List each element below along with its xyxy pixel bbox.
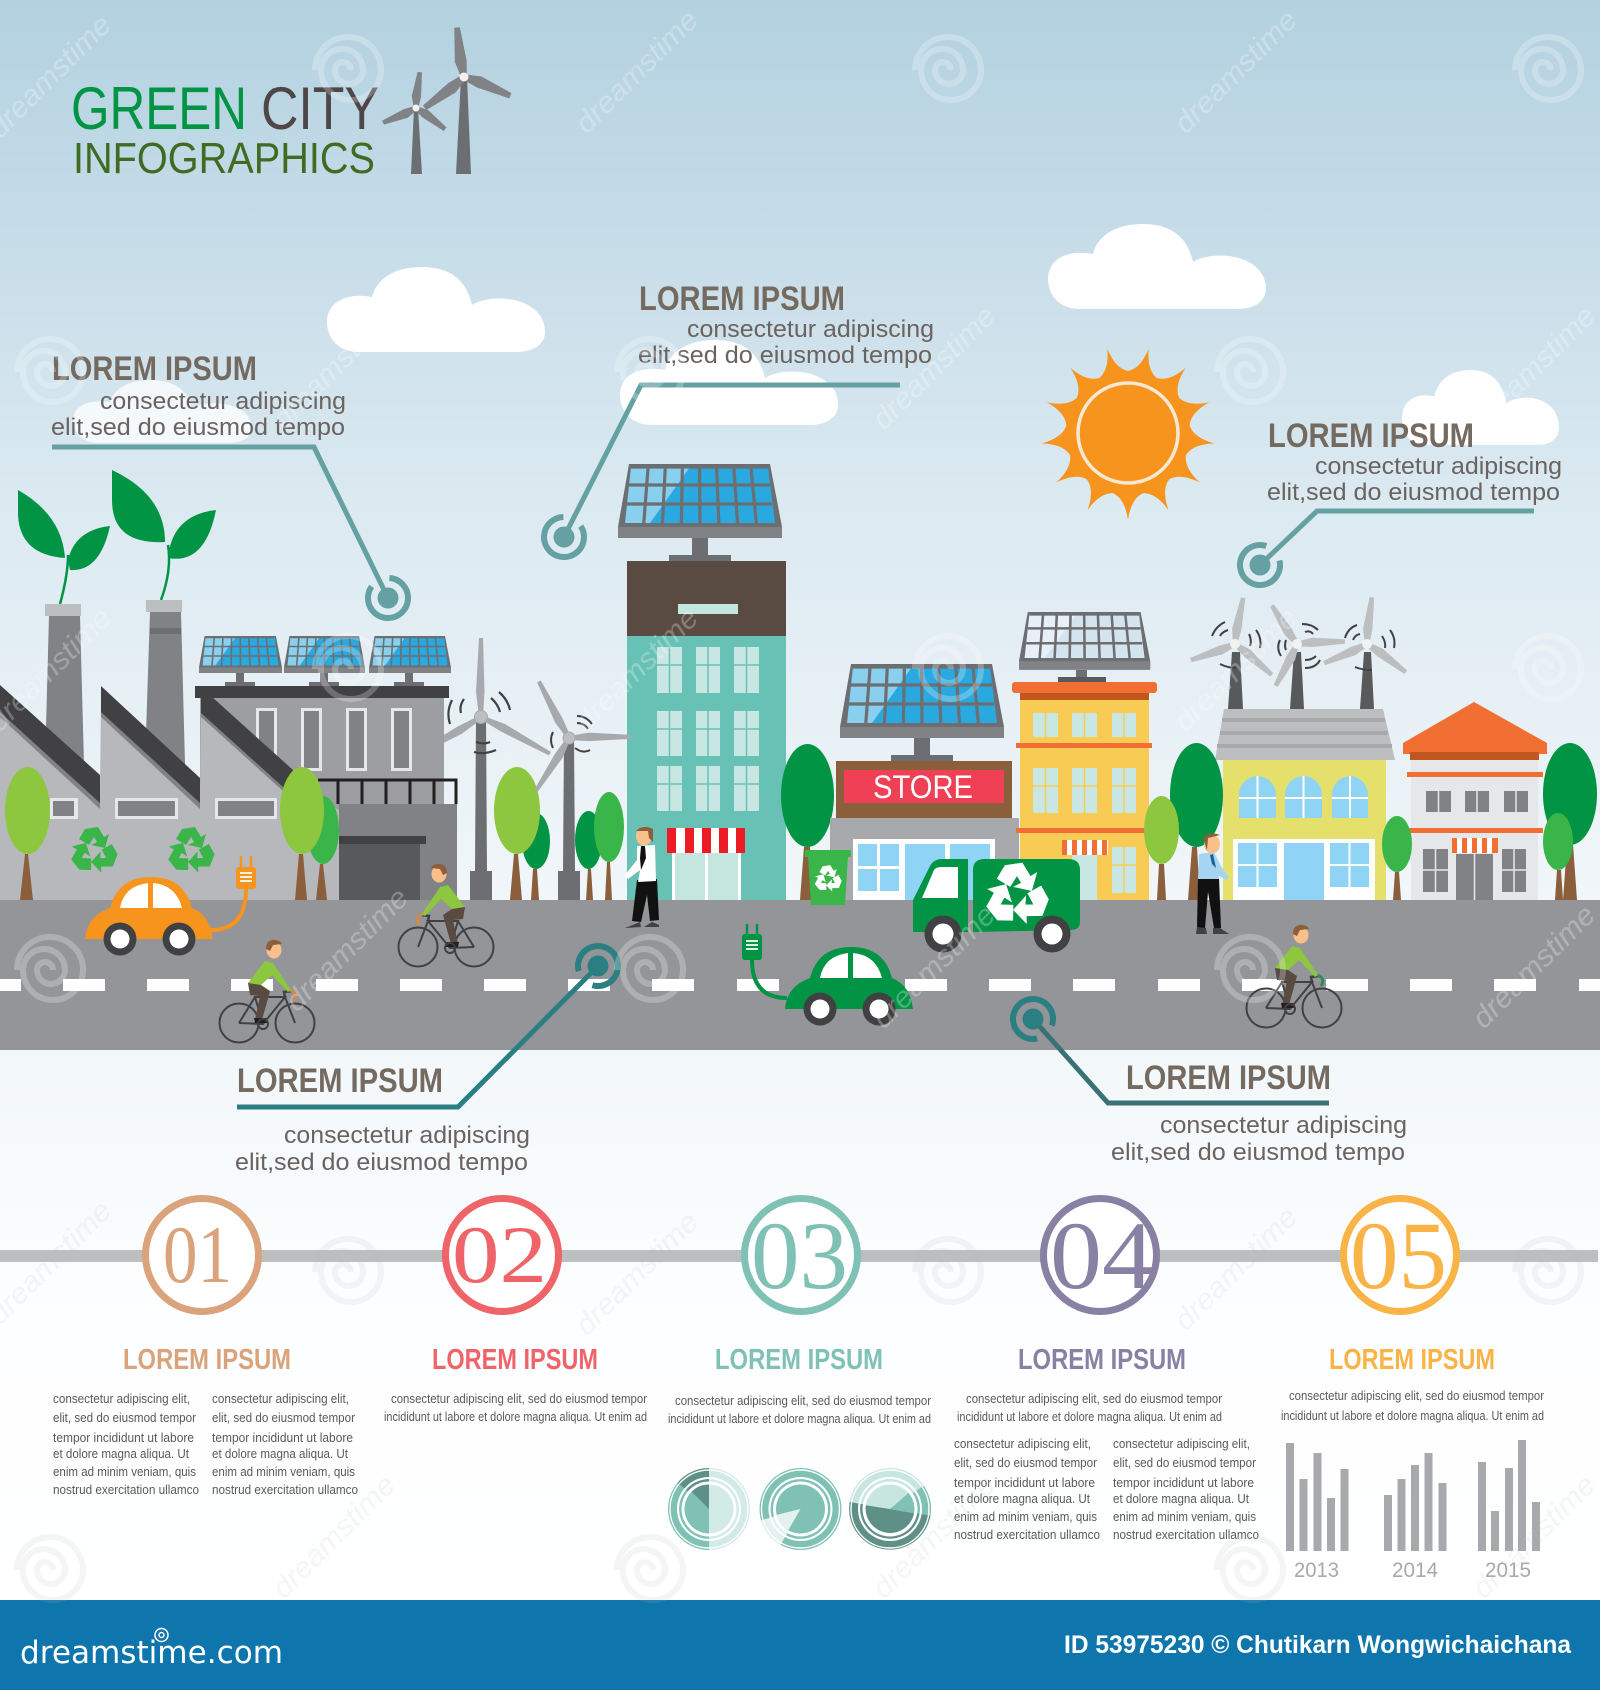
factory	[0, 600, 457, 900]
step 03	[668, 1198, 932, 1550]
callout text	[1111, 1112, 1407, 1166]
callout heading: LOREM IPSUM	[52, 350, 257, 388]
step text column 1: enim ad minim veniam, quis	[53, 1464, 196, 1479]
step text column 2: consectetur adipiscing elit,	[1113, 1436, 1250, 1451]
icon: plant on chimney 2	[112, 470, 216, 600]
timeline bar	[0, 1250, 1598, 1262]
footer credit: ID 53975230 © Chutikarn Wongwichaichana	[1064, 1631, 1572, 1659]
icon: title wind turbines	[382, 27, 513, 174]
callout heading: LOREM IPSUM	[1126, 1059, 1331, 1097]
teal building	[627, 561, 786, 900]
step text column 1: nostrud exercitation ullamco	[53, 1482, 199, 1497]
chimney 2	[145, 600, 185, 764]
title: GREEN	[71, 75, 247, 142]
watermark overlay: dreamstime	[569, 3, 705, 140]
step text column 1: nostrud exercitation ullamco	[954, 1527, 1100, 1542]
step text column 2: et dolore magna aliqua. Ut	[212, 1446, 348, 1461]
number circle: 05	[1350, 1202, 1447, 1309]
icon: recycle symbols	[66, 827, 219, 876]
wind turbine behind factory	[412, 638, 552, 900]
step text column 1: tempor incididunt ut labore	[954, 1475, 1095, 1490]
watermark overlay: dreamstime	[1168, 3, 1304, 140]
shopfront	[1233, 839, 1375, 900]
icon: recycle	[812, 865, 844, 893]
trees right side	[1144, 743, 1597, 900]
cyclist 2	[220, 940, 314, 1042]
callout text: consectetur adipiscing	[1160, 1112, 1407, 1139]
callout: right top	[1236, 417, 1562, 589]
recycling truck	[913, 859, 1080, 952]
step text column 1: consectetur adipiscing elit,	[954, 1436, 1091, 1451]
step text: incididunt ut labore et dolore magna aliqua. Ut enim ad	[957, 1409, 1222, 1424]
callout leader line and ring	[536, 385, 900, 565]
step 01	[53, 1198, 358, 1497]
arched windows	[1239, 776, 1368, 818]
callout: road left	[235, 942, 622, 1176]
watermark overlay: dreamstime	[569, 1205, 705, 1342]
cyclist 1	[398, 864, 494, 966]
step heading: LOREM IPSUM	[1018, 1344, 1186, 1376]
wind turbine 2 towers and trees	[494, 738, 624, 900]
watermark overlay: dreamstime	[1168, 601, 1304, 738]
callout heading: LOREM IPSUM	[237, 1062, 443, 1100]
watermark overlay: dreamstime	[266, 299, 402, 436]
icon: sun	[1040, 345, 1216, 520]
callout text: consectetur adipiscing	[284, 1122, 530, 1149]
year labels: 2015	[1485, 1559, 1531, 1582]
step text column 2: elit, sed do eiusmod tempor	[212, 1410, 356, 1425]
watermark overlay: dreamstime	[279, 881, 415, 1018]
callout text: elit,sed do eiusmod tempo	[1267, 479, 1560, 506]
callout text: consectetur adipiscing	[1315, 453, 1562, 480]
step text	[957, 1391, 1223, 1424]
callout text: elit,sed do eiusmod tempo	[51, 414, 345, 441]
number circle	[446, 1198, 558, 1312]
step 05	[1281, 1198, 1545, 1582]
factory windows	[50, 798, 277, 819]
solar panels on factory	[199, 636, 451, 686]
watermark overlay: dreamstime	[1466, 1468, 1600, 1605]
callout: left top	[51, 350, 409, 619]
callout text: elit,sed do eiusmod tempo	[235, 1149, 528, 1176]
pie chart 2	[760, 1468, 842, 1550]
step text	[384, 1391, 648, 1424]
year labels: 2013	[1294, 1559, 1339, 1582]
number circle	[146, 1198, 258, 1312]
store sign text: STORE	[873, 769, 973, 805]
step text column 2: nostrud exercitation ullamco	[1113, 1527, 1259, 1542]
icon: plant on chimney 1	[18, 490, 110, 604]
step text: incididunt ut labore et dolore magna aliqua. Ut enim ad	[668, 1411, 931, 1426]
road	[0, 900, 1600, 1050]
step text column 1	[954, 1436, 1100, 1542]
watermark overlay: dreamstime	[266, 1468, 402, 1605]
step text column 2: nostrud exercitation ullamco	[212, 1482, 358, 1497]
step text: consectetur adipiscing elit, sed do eiusmod tempor	[391, 1391, 648, 1406]
solar panel on teal building	[618, 464, 782, 561]
number circle: 02	[452, 1209, 547, 1300]
awning	[667, 828, 745, 853]
chimney 1	[45, 604, 84, 764]
pie chart 3	[849, 1468, 931, 1550]
step text column 2	[1113, 1436, 1259, 1542]
callout leader line and ring	[1009, 995, 1329, 1103]
pie chart 1	[668, 1468, 750, 1550]
step 02	[384, 1198, 648, 1424]
title	[71, 75, 379, 183]
watermark overlay: dreamstime	[1466, 898, 1600, 1035]
step 04	[954, 1198, 1259, 1542]
step text column 1: et dolore magna aliqua. Ut	[53, 1446, 189, 1461]
cloud top right	[1048, 224, 1266, 309]
step text column 2: tempor incididunt ut labore	[212, 1430, 353, 1445]
step text column 1	[53, 1391, 199, 1497]
step text column 2: consectetur adipiscing elit,	[212, 1391, 349, 1406]
callout heading: LOREM IPSUM	[639, 280, 845, 318]
watermark overlay: dreamstime	[1466, 299, 1600, 436]
building windows	[1033, 713, 1136, 900]
callout text	[51, 388, 346, 441]
step text column 1: consectetur adipiscing elit,	[53, 1391, 190, 1406]
green roof house	[1215, 709, 1395, 900]
callout text: elit,sed do eiusmod tempo	[1111, 1139, 1405, 1166]
orange roof house	[1403, 702, 1547, 900]
sky background	[0, 0, 1600, 900]
callout text	[235, 1122, 530, 1176]
sawtooth factory hall	[0, 685, 339, 900]
charging cable and plug	[211, 856, 256, 930]
tree by store	[781, 744, 834, 900]
wind turbines on roof	[1190, 597, 1409, 709]
callout text: consectetur adipiscing	[687, 316, 934, 343]
solar panel on yellow building	[1019, 612, 1150, 682]
charging cable and plug	[742, 924, 787, 998]
green electric car	[742, 924, 913, 1026]
step text	[668, 1393, 932, 1426]
lane dashes	[0, 979, 1600, 991]
person: man with blue shirt	[1196, 834, 1229, 934]
year labels: 2014	[1392, 1559, 1438, 1582]
balcony and door block	[318, 780, 457, 900]
callout text: consectetur adipiscing	[100, 388, 346, 415]
door	[672, 853, 741, 900]
building windows	[657, 647, 759, 811]
step text: incididunt ut labore et dolore magna aliqua. Ut enim ad	[384, 1409, 647, 1424]
footer logo swirl	[155, 1628, 168, 1642]
callout leader line and ring	[237, 942, 622, 1107]
callout text	[1267, 453, 1562, 506]
step heading: LOREM IPSUM	[715, 1344, 883, 1376]
step text	[1281, 1388, 1545, 1423]
step heading: LOREM IPSUM	[432, 1344, 598, 1376]
wind turbine 2 blades	[533, 680, 631, 793]
lower background	[0, 1050, 1600, 1600]
awning	[1062, 840, 1108, 855]
step text: consectetur adipiscing elit, sed do eiusmod tempor	[1289, 1388, 1545, 1403]
yellow building	[1012, 682, 1157, 900]
orange electric car	[85, 856, 256, 956]
watermark overlay: dreamstime	[569, 601, 705, 738]
icon: recycle	[979, 863, 1055, 929]
cloud top centre-left	[327, 267, 545, 352]
watermark overlay: dreamstime	[866, 299, 1002, 436]
awning	[1452, 838, 1498, 853]
callout: centre top	[536, 280, 934, 565]
step heading: LOREM IPSUM	[1329, 1344, 1495, 1376]
footer bar	[0, 1600, 1600, 1690]
number circle: 01	[163, 1209, 232, 1300]
callout leader line and ring	[52, 447, 409, 619]
watermark overlay: dreamstime	[866, 898, 1002, 1035]
step text column 1: elit, sed do eiusmod tempor	[53, 1410, 197, 1425]
step text column 1: et dolore magna aliqua. Ut	[954, 1491, 1090, 1506]
cloud right	[1402, 370, 1559, 445]
footer brand: dreamstime.com	[20, 1635, 283, 1671]
step text: consectetur adipiscing elit, sed do eiusmod tempor	[675, 1393, 932, 1408]
rear factory block	[195, 686, 449, 900]
number circle: 04	[1050, 1202, 1154, 1309]
person: man with white shirt	[625, 826, 659, 928]
bar chart	[1286, 1440, 1540, 1582]
cloud behind centre label	[620, 340, 838, 425]
solar panel on store	[840, 664, 1004, 761]
step text: incididunt ut labore et dolore magna aliqua. Ut enim ad	[1281, 1408, 1544, 1423]
watermark overlay: dreamstime	[866, 1468, 1002, 1605]
step text column 2: enim ad minim veniam, quis	[212, 1464, 355, 1479]
callout: road right	[1009, 995, 1407, 1166]
store	[830, 761, 1019, 900]
step text column 1: elit, sed do eiusmod tempor	[954, 1455, 1098, 1470]
step text column 2: et dolore magna aliqua. Ut	[1113, 1491, 1249, 1506]
house windows	[1423, 791, 1528, 900]
trees near factory	[5, 767, 339, 900]
title: CITY	[261, 75, 379, 142]
number circle: 03	[751, 1202, 848, 1309]
callout text	[638, 316, 934, 369]
step text: consectetur adipiscing elit, sed do eiusmod tempor	[966, 1391, 1223, 1406]
recycling bin	[805, 850, 851, 905]
callout heading: LOREM IPSUM	[1268, 417, 1474, 455]
step text column 2: enim ad minim veniam, quis	[1113, 1509, 1256, 1524]
step text column 2: tempor incididunt ut labore	[1113, 1475, 1254, 1490]
cloud behind left label	[73, 380, 252, 443]
watermark overlay: dreamstime	[1168, 1200, 1304, 1337]
step text column 1: tempor incididunt ut labore	[53, 1430, 194, 1445]
cyclist 3	[1246, 925, 1342, 1028]
step text column 2	[212, 1391, 358, 1497]
title: INFOGRAPHICS	[73, 134, 375, 183]
callout text: elit,sed do eiusmod tempo	[638, 342, 932, 369]
callout leader line and ring	[1236, 511, 1534, 589]
step text column 2: elit, sed do eiusmod tempor	[1113, 1455, 1257, 1470]
step heading: LOREM IPSUM	[123, 1344, 291, 1376]
step text column 1: enim ad minim veniam, quis	[954, 1509, 1097, 1524]
year labels	[1294, 1559, 1531, 1582]
